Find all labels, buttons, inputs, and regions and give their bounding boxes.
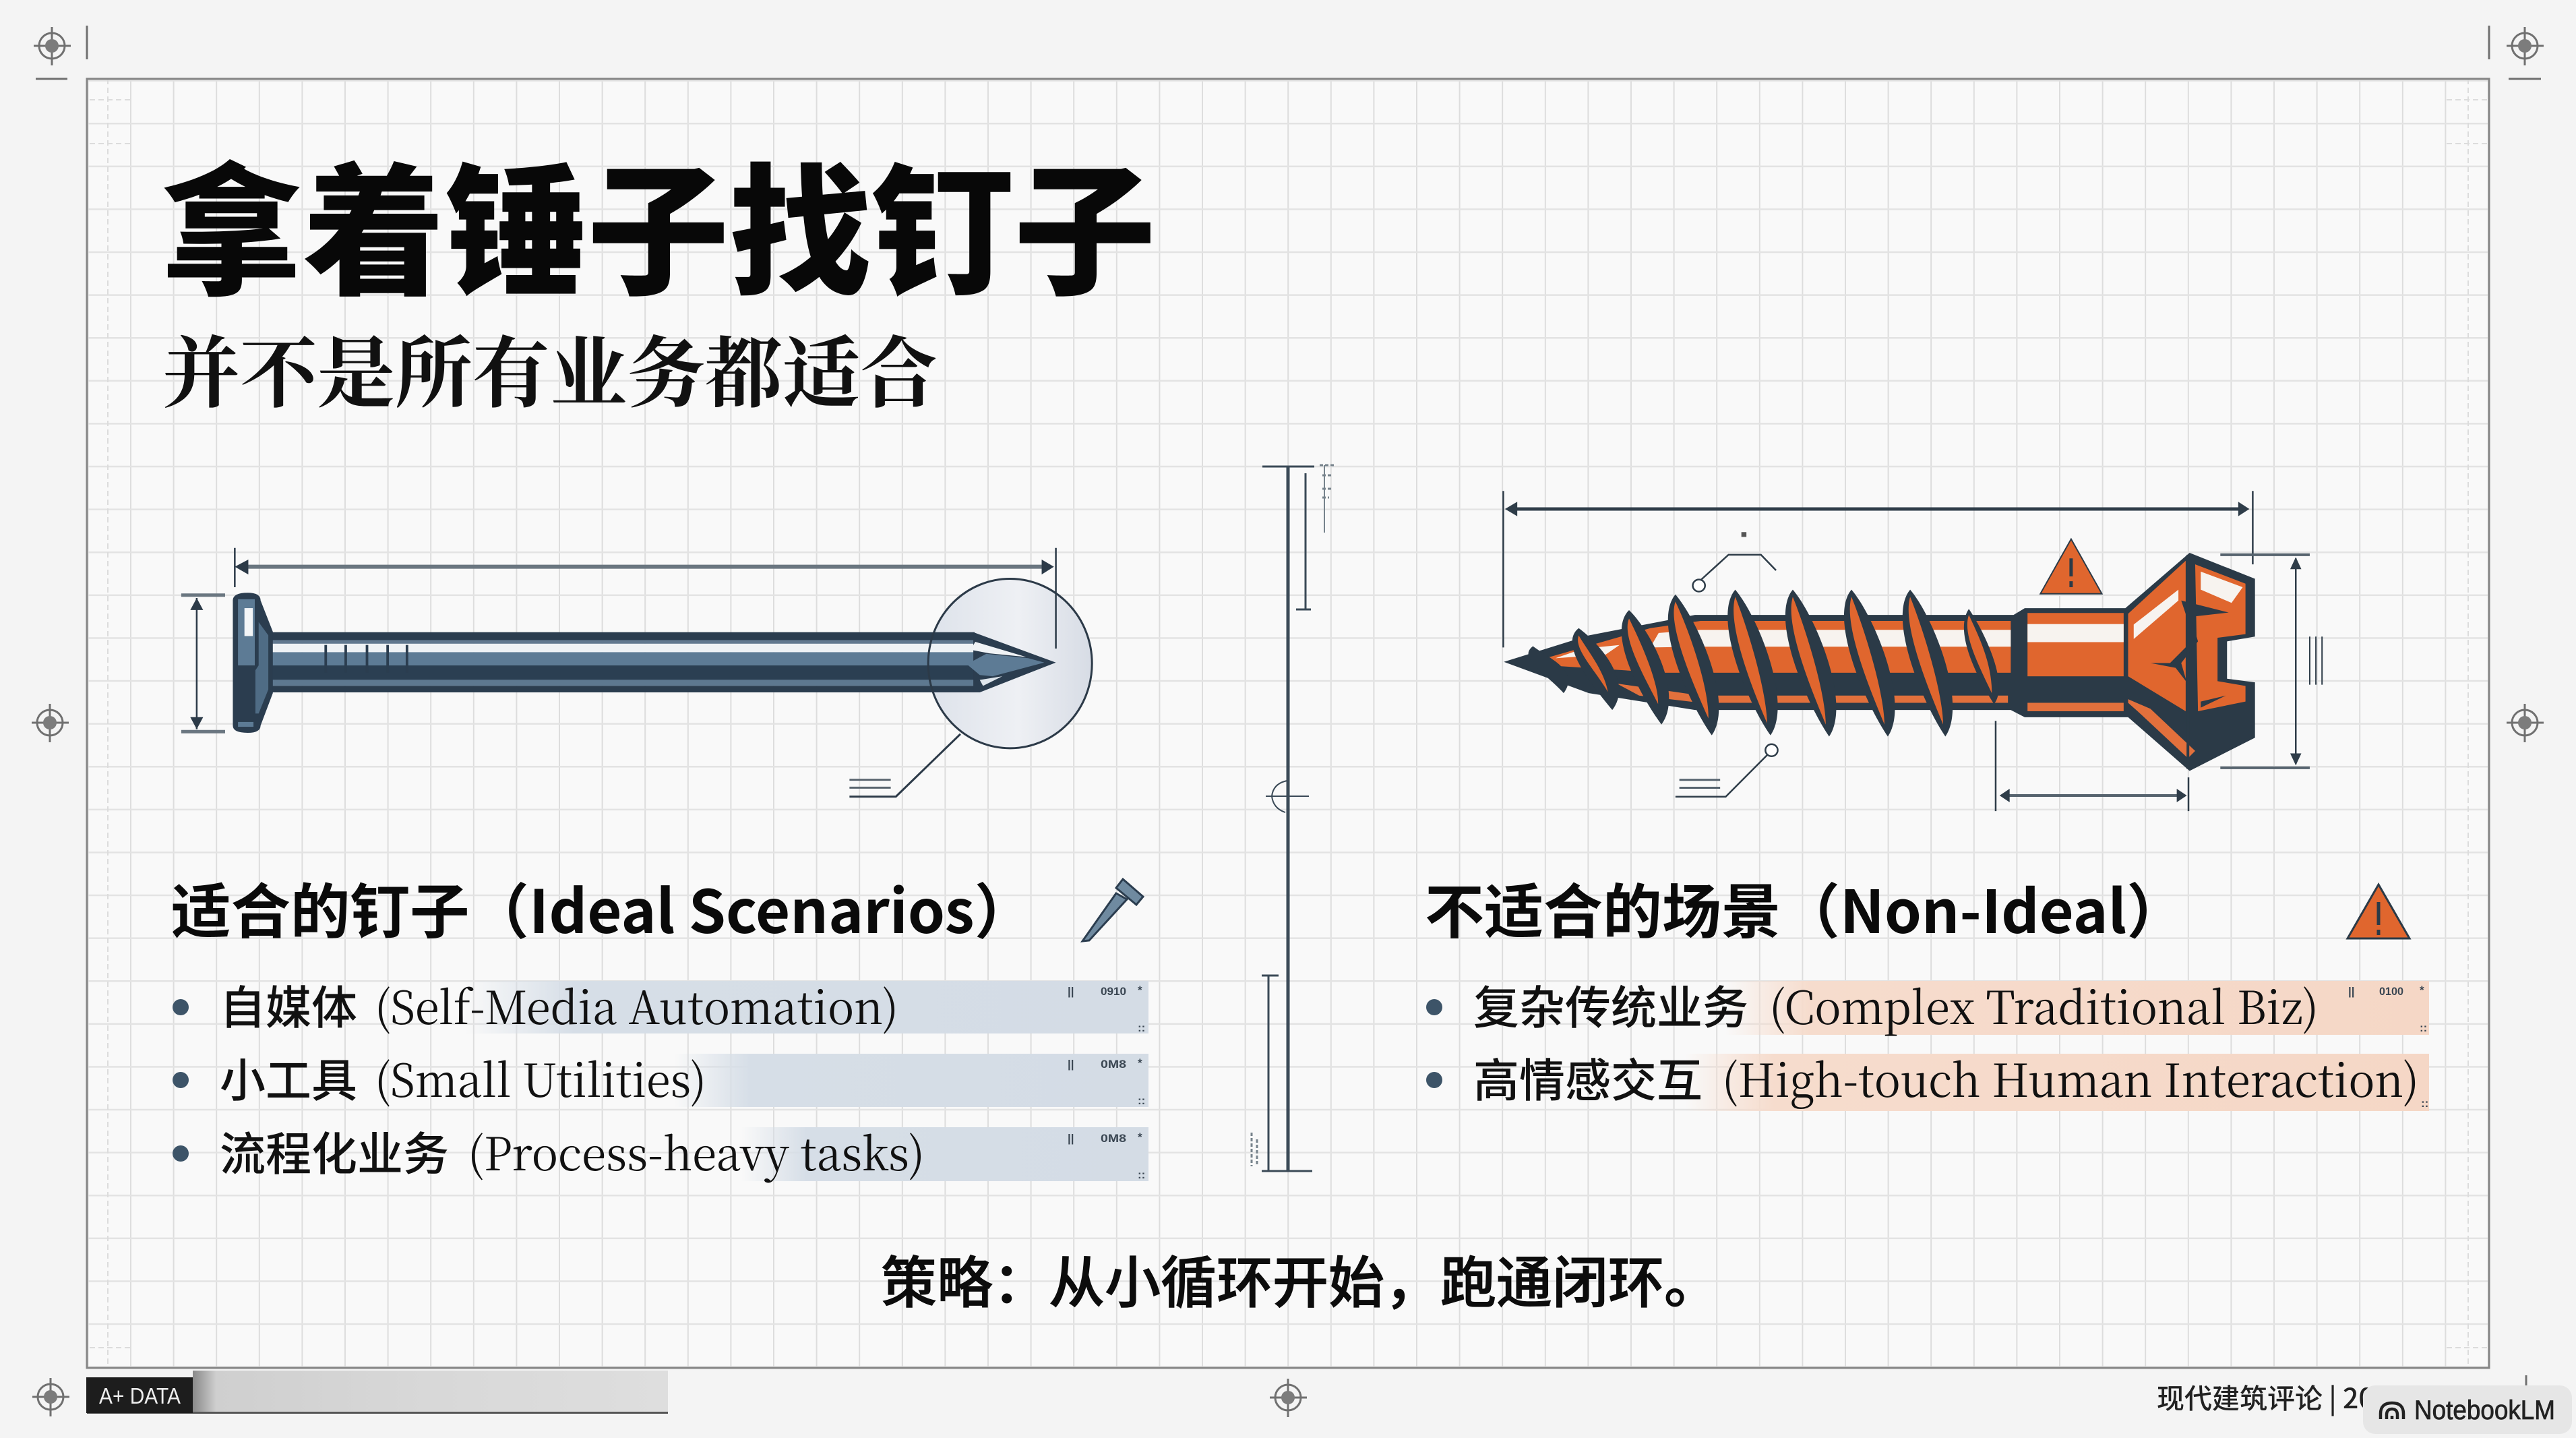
shaft grip ticks [324, 645, 408, 673]
bar micro marks [2348, 984, 2428, 1110]
head height dimension [181, 595, 225, 731]
screw head [2128, 555, 2246, 769]
screw silhouette [1504, 553, 2255, 771]
subtitle: 并不是所有业务都适合 [162, 311, 938, 423]
nail shaft [272, 632, 975, 692]
bar micro marks: :: [1138, 1021, 1145, 1034]
screw shank colour bands [1541, 621, 2011, 702]
panel: non-ideal scenarios [1425, 865, 2429, 1111]
list item: self-media: (Self-Media Automation) [375, 972, 898, 1038]
screw dimensions and leaders [1503, 491, 2322, 811]
list item: small utilities: (Small Utilities) [375, 1045, 706, 1110]
bar micro marks: * [1138, 1131, 1142, 1143]
list item: process-heavy [173, 1117, 925, 1184]
icon: nail [1082, 879, 1143, 941]
highlight bars [465, 981, 1148, 1181]
bar micro marks: * [2420, 984, 2424, 996]
registration mark: middle left [32, 704, 69, 742]
list item: high-touch [1426, 1044, 2419, 1110]
panel: ideal scenarios [171, 864, 1148, 1184]
footer: publication name: 现代建筑评论 | 20 [2157, 1376, 2374, 1416]
registration mark: bottom centre [1270, 1379, 1307, 1417]
title: 拿着锤子找钉子 [160, 118, 1156, 324]
list item: process-heavy: (Process-heavy tasks) [468, 1118, 925, 1184]
thread orange faces [1578, 597, 1992, 725]
nail head [233, 593, 273, 733]
registration mark: bottom left [32, 1378, 69, 1416]
registration mark: top left [34, 26, 87, 79]
bar micro marks: 0M8 [1101, 1058, 1126, 1071]
bar micro marks: || [1068, 985, 1074, 998]
footer: data label bar [86, 1371, 668, 1414]
highlight bars [1685, 981, 2429, 1111]
list item: complex traditional [1426, 971, 2319, 1038]
bar micro marks: || [1068, 1132, 1074, 1145]
bar micro marks: || [1068, 1058, 1074, 1071]
list item: process-heavy: 流程化业务 [220, 1117, 449, 1184]
list item: self-media: 自媒体 [220, 971, 357, 1038]
NotebookLM badge [2363, 1385, 2572, 1434]
screw illustration [1503, 491, 2322, 811]
bar micro marks: :: [1138, 1094, 1145, 1107]
bar micro marks: * [1138, 984, 1142, 996]
heading: ideal scenarios: 适合的钉子（Ideal Scenarios） [171, 864, 1034, 951]
screw collar [2027, 613, 2124, 711]
registration mark: middle right [2507, 704, 2544, 742]
bar micro marks: 0100 [2379, 985, 2403, 998]
screw warning triangle [2040, 539, 2102, 594]
center divider with dimension lines [1252, 465, 1335, 1171]
list item: complex traditional: (Complex Traditional Biz) [1769, 972, 2319, 1038]
nail illustration [181, 548, 1092, 797]
nail tip [967, 632, 1056, 692]
bar micro marks: :: [2421, 1097, 2428, 1110]
list item: small utilities: 小工具 [220, 1044, 357, 1110]
bar micro marks [1068, 984, 1145, 1181]
screw threads [1529, 590, 1999, 736]
list item: high-touch: (High-touch Human Interaction) [1722, 1045, 2419, 1110]
icon: warning triangle [2348, 885, 2410, 938]
list item: small utilities [173, 1044, 706, 1110]
bar micro marks: 0M8 [1101, 1132, 1126, 1145]
registration mark: bottom right fragment [2525, 1375, 2527, 1386]
list item: self-media [173, 971, 898, 1038]
footer: data label bar: A+ DATA [99, 1383, 181, 1408]
magnifier outline and leader [849, 578, 1092, 797]
bar micro marks: 0910 [1101, 985, 1126, 998]
bar micro marks: :: [1138, 1168, 1145, 1181]
list item: complex traditional: 复杂传统业务 [1473, 971, 1748, 1038]
heading: non-ideal: 不适合的场景（Non-Ideal） [1425, 865, 2186, 951]
list item: high-touch: 高情感交互 [1473, 1044, 1703, 1110]
bar micro marks: * [1138, 1056, 1142, 1069]
magnifier circle [928, 578, 1092, 748]
icon: NotebookLM [2381, 1403, 2403, 1419]
length dimension [235, 548, 1056, 649]
NotebookLM badge: NotebookLM [2414, 1396, 2555, 1425]
bar micro marks: :: [2420, 1021, 2427, 1034]
strategy statement: 策略：从小循环开始，跑通闭环。 [881, 1238, 1720, 1319]
bar micro marks: || [2348, 985, 2355, 998]
registration mark: top right [2489, 26, 2544, 79]
